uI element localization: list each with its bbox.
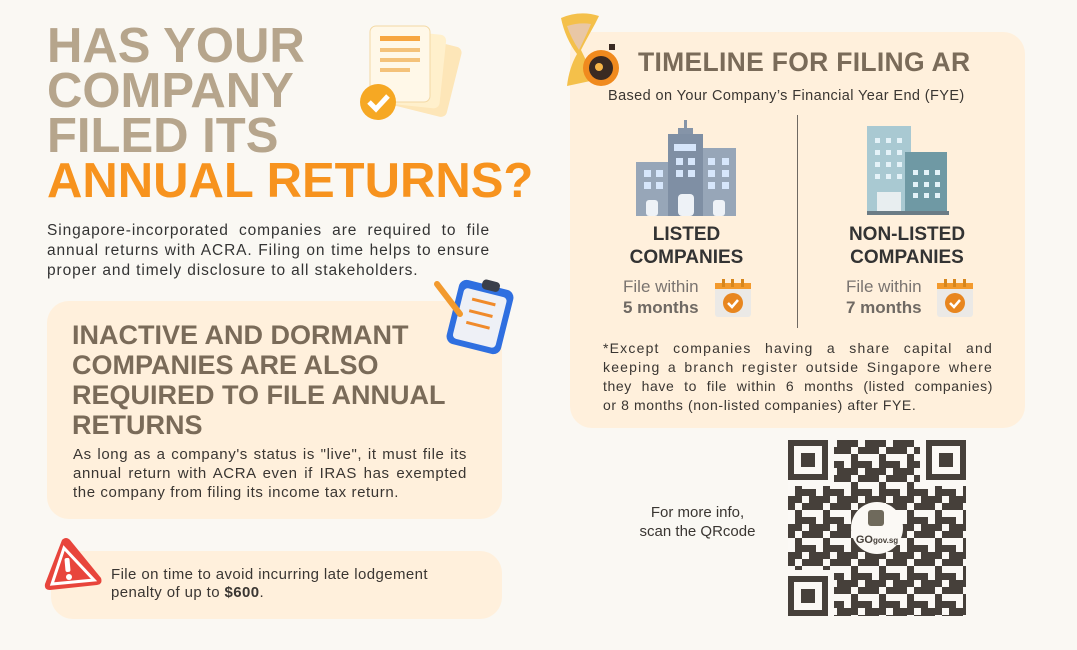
title: ANNUAL RETURNS?	[47, 154, 533, 208]
intro paragraph: annual returns with ACRA. Filing on time helps to ensure	[47, 242, 490, 259]
panel body text	[73, 446, 467, 501]
qr info text	[640, 504, 755, 540]
label: non-listed companies	[849, 224, 965, 268]
icon: hourglass stopwatch	[561, 13, 619, 86]
panel: timeline	[570, 32, 1025, 428]
footnote	[603, 340, 993, 413]
file within 5 months	[623, 277, 699, 317]
icon: documents with check	[360, 26, 462, 120]
panel body text: the company from filing its income tax return.	[73, 484, 399, 501]
footnote: or 8 months (non-listed companies) after FYE.	[603, 397, 916, 413]
label: non-listed companies: COMPANIES	[850, 247, 964, 268]
intro paragraph: proper and timely disclosure to all stakeholders.	[47, 262, 418, 279]
icon: calendar	[715, 279, 751, 317]
footnote: they have to file within 6 months (listed companies)	[603, 378, 993, 394]
footnote: keeping a branch register outside Singapore where	[603, 359, 993, 375]
qr info text: For more info,	[651, 504, 744, 521]
label: non-listed companies: NON-LISTED	[849, 224, 965, 245]
QR code: GOgov.sg	[856, 534, 898, 546]
icon: warning	[44, 538, 102, 590]
panel heading: INACTIVE AND DORMANT COMPANIES ARE ALSO REQUIRED TO FILE ANNUAL RETURNS	[72, 320, 445, 440]
intro paragraph	[47, 222, 490, 279]
label: listed companies	[630, 224, 743, 268]
subtitle: Based on Your Company’s Financial Year End (FYE)	[608, 88, 965, 104]
icon: clipboard	[434, 280, 514, 354]
panel: inactive and dormant	[47, 301, 502, 519]
penalty text: penalty of up to $600.	[111, 584, 264, 601]
file within 7 months	[846, 277, 922, 317]
panel body text: annual return with ACRA even if IRAS has exempted	[73, 465, 467, 482]
file within 7 months: 7 months	[846, 298, 922, 317]
file within 5 months: 5 months	[623, 298, 699, 317]
column: non-listed	[846, 126, 973, 317]
qr info text: scan the QRcode	[640, 523, 755, 540]
title: COMPANY	[47, 64, 294, 118]
file within 5 months: File within	[623, 277, 699, 296]
label: listed companies: COMPANIES	[630, 247, 743, 268]
panel body text: As long as a company's status is "live", it must file its	[73, 446, 467, 463]
penalty text	[111, 566, 428, 601]
icon: calendar	[937, 279, 973, 317]
intro paragraph: Singapore-incorporated companies are required to file	[47, 222, 490, 239]
penalty text: File on time to avoid incurring late lodgement	[111, 566, 428, 583]
title: FILED ITS	[47, 109, 278, 163]
title: HAS YOUR	[47, 19, 305, 73]
file within 7 months: File within	[846, 277, 922, 296]
footnote: *Except companies having a share capital and	[603, 340, 993, 356]
title	[47, 19, 533, 208]
panel: penalty	[51, 551, 502, 619]
label: listed companies: LISTED	[653, 224, 720, 245]
column: listed	[623, 120, 751, 317]
icon: listed building	[636, 120, 736, 216]
timeline heading: TIMELINE FOR FILING AR	[638, 47, 970, 77]
QR code	[788, 440, 966, 616]
icon: non-listed building	[867, 126, 949, 215]
